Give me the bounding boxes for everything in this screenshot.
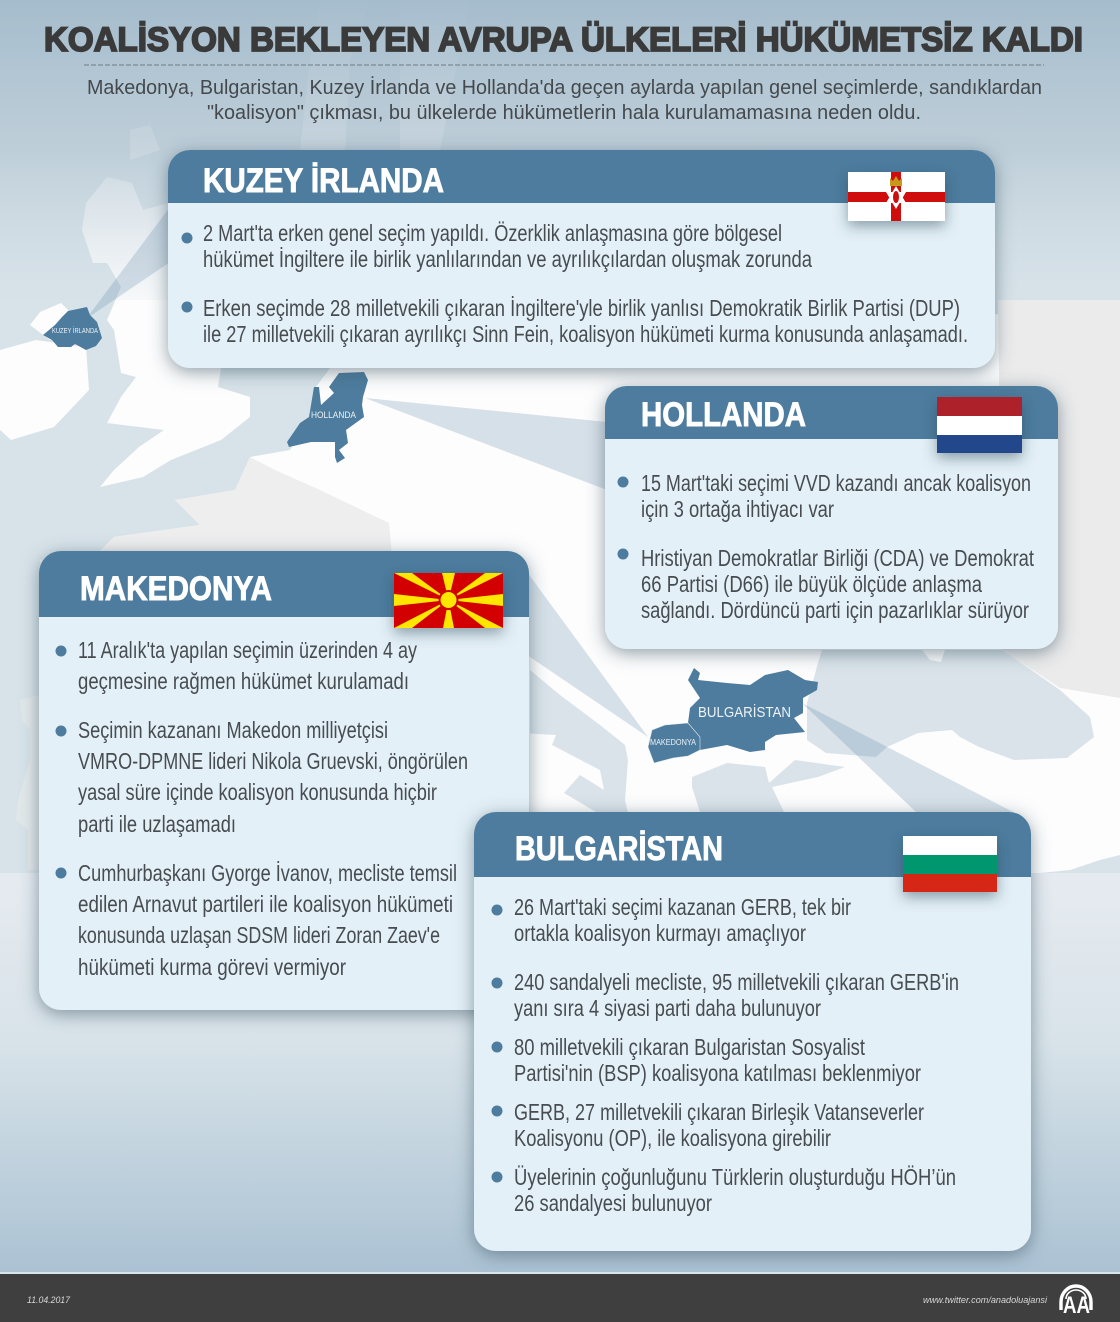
bullet text block xyxy=(492,894,959,1216)
panel: Makedonya xyxy=(39,551,529,1010)
bullet text block: edilen Arnavut partileri ile koalisyon hükümeti xyxy=(78,891,453,917)
bullet text block: GERB, 27 milletvekili çıkaran Birleşik Vatanseverler xyxy=(514,1099,924,1125)
connector wedges xyxy=(86,207,1017,814)
bullet text block: için 3 ortağa ihtiyacı var xyxy=(641,496,834,522)
bullet text block: hükümeti kurma görevi vermiyor xyxy=(78,954,346,980)
bullet text block: 80 milletvekili çıkaran Bulgaristan Sosyalist xyxy=(514,1034,865,1060)
map region: Bulgaristan xyxy=(688,668,818,752)
bullet text block: VMRO-DPMNE lideri Nikola Gruevski, öngörülen xyxy=(78,748,468,774)
bullet text block: 11 Aralık'ta yapılan seçimin üzerinden 4 ay xyxy=(78,637,417,663)
bullet text block: sağlandı. Dördüncü parti için pazarlıklar sürüyor xyxy=(641,597,1029,623)
flag: Netherlands xyxy=(937,397,1022,453)
heading: Hollanda: HOLLANDA xyxy=(641,396,806,434)
flag: North Macedonia xyxy=(394,573,503,628)
bullet text block: 26 Mart'taki seçimi kazanan GERB, tek bir xyxy=(514,894,851,920)
map region: Makedonya: MAKEDONYA xyxy=(650,737,696,747)
map region: Kuzey İrlanda: KUZEY İRLANDA xyxy=(52,326,98,335)
bullet text block: 66 Partisi (D66) ile büyük ölçüde anlaşma xyxy=(641,571,982,597)
icon: Anadolu Agency logo: AA xyxy=(1063,1292,1090,1319)
bullet text block: yanı sıra 4 siyasi parti daha bulunuyor xyxy=(514,995,821,1021)
bullet text block: hükümet İngiltere ile birlik yanlılarından ve ayrılıkçılardan oluşmak zorunda xyxy=(203,246,812,272)
date: 11.04.2017 xyxy=(27,1295,71,1305)
map region: Hollanda xyxy=(287,372,368,463)
bullet text block xyxy=(618,470,1034,623)
panel: Bulgaristan xyxy=(474,812,1031,1251)
panel: Kuzey İrlanda xyxy=(168,150,995,368)
bullet text block: geçmesine rağmen hükümet kurulamadı xyxy=(78,668,409,694)
map region: Hollanda: HOLLANDA xyxy=(311,410,357,421)
bullet text block: parti ile uzlaşamadı xyxy=(78,811,236,837)
subtitle: Makedonya, Bulgaristan, Kuzey İrlanda ve Hollanda'da geçen aylarda yapılan genel seçimlerde, sandıklardan xyxy=(87,76,1042,99)
social link: www.twitter.com/anadoluajansi xyxy=(923,1295,1048,1306)
footer xyxy=(0,1272,1120,1322)
heading: Bulgaristan: BULGARİSTAN xyxy=(515,830,723,868)
map region: Bulgaristan: BULGARİSTAN xyxy=(698,703,791,721)
subtitle: "koalisyon" çıkması, bu ülkelerde hükümetlerin hala kurulamamasına neden oldu. xyxy=(207,102,921,124)
title: KOALİSYON BEKLEYEN AVRUPA ÜLKELERİ HÜKÜMETSİZ KALDI xyxy=(44,21,1083,59)
map region: Makedonya xyxy=(648,723,700,763)
icon: Anadolu Agency logo xyxy=(1061,1286,1091,1319)
bullet text block xyxy=(56,637,468,980)
bullet text block: Koalisyonu (OP), ile koalisyona girebilir xyxy=(514,1125,831,1151)
bullet text block: Hristiyan Demokratlar Birliği (CDA) ve Demokrat xyxy=(641,545,1034,571)
bullet text block: yasal süre içinde koalisyon konusunda hiçbir xyxy=(78,779,437,805)
bullet text block: ortakla koalisyon kurmayı amaçlıyor xyxy=(514,920,806,946)
bullet text block: Seçimin kazananı Makedon milliyetçisi xyxy=(78,717,388,743)
bullet text block: Cumhurbaşkanı Gyorge İvanov, mecliste temsil xyxy=(78,860,457,886)
bullet text block: konusunda uzlaşan SDSM lideri Zoran Zaev'e xyxy=(78,922,440,948)
bullet text block: Erken seçimde 28 milletvekili çıkaran İngiltere'yle birlik yanlısı Demokratik Birlik Partisi (DUP) xyxy=(203,295,960,321)
bullet text block: Partisi'nin (BSP) koalisyona katılması beklenmiyor xyxy=(514,1060,921,1086)
background map of Europe xyxy=(0,0,1120,873)
subtitle xyxy=(87,76,1042,124)
heading: Makedonya: MAKEDONYA xyxy=(80,570,272,608)
bullet text block: Üyelerinin çoğunluğunu Türklerin oluşturduğu HÖH’ün xyxy=(514,1164,956,1190)
map region: Kuzey İrlanda xyxy=(43,307,102,350)
flag: Northern Ireland xyxy=(848,172,945,221)
bullet text block: 2 Mart'ta erken genel seçim yapıldı. Özerklik anlaşmasına göre bölgesel xyxy=(203,220,782,246)
bullet text block: 26 sandalyesi bulunuyor xyxy=(514,1190,712,1216)
flag: Bulgaria xyxy=(903,836,997,892)
bullet text block xyxy=(182,220,968,347)
panel: Hollanda xyxy=(605,386,1058,649)
bullet text block: 240 sandalyeli mecliste, 95 milletvekili çıkaran GERB'in xyxy=(514,969,959,995)
heading: Kuzey İrlanda: KUZEY İRLANDA xyxy=(203,162,444,200)
